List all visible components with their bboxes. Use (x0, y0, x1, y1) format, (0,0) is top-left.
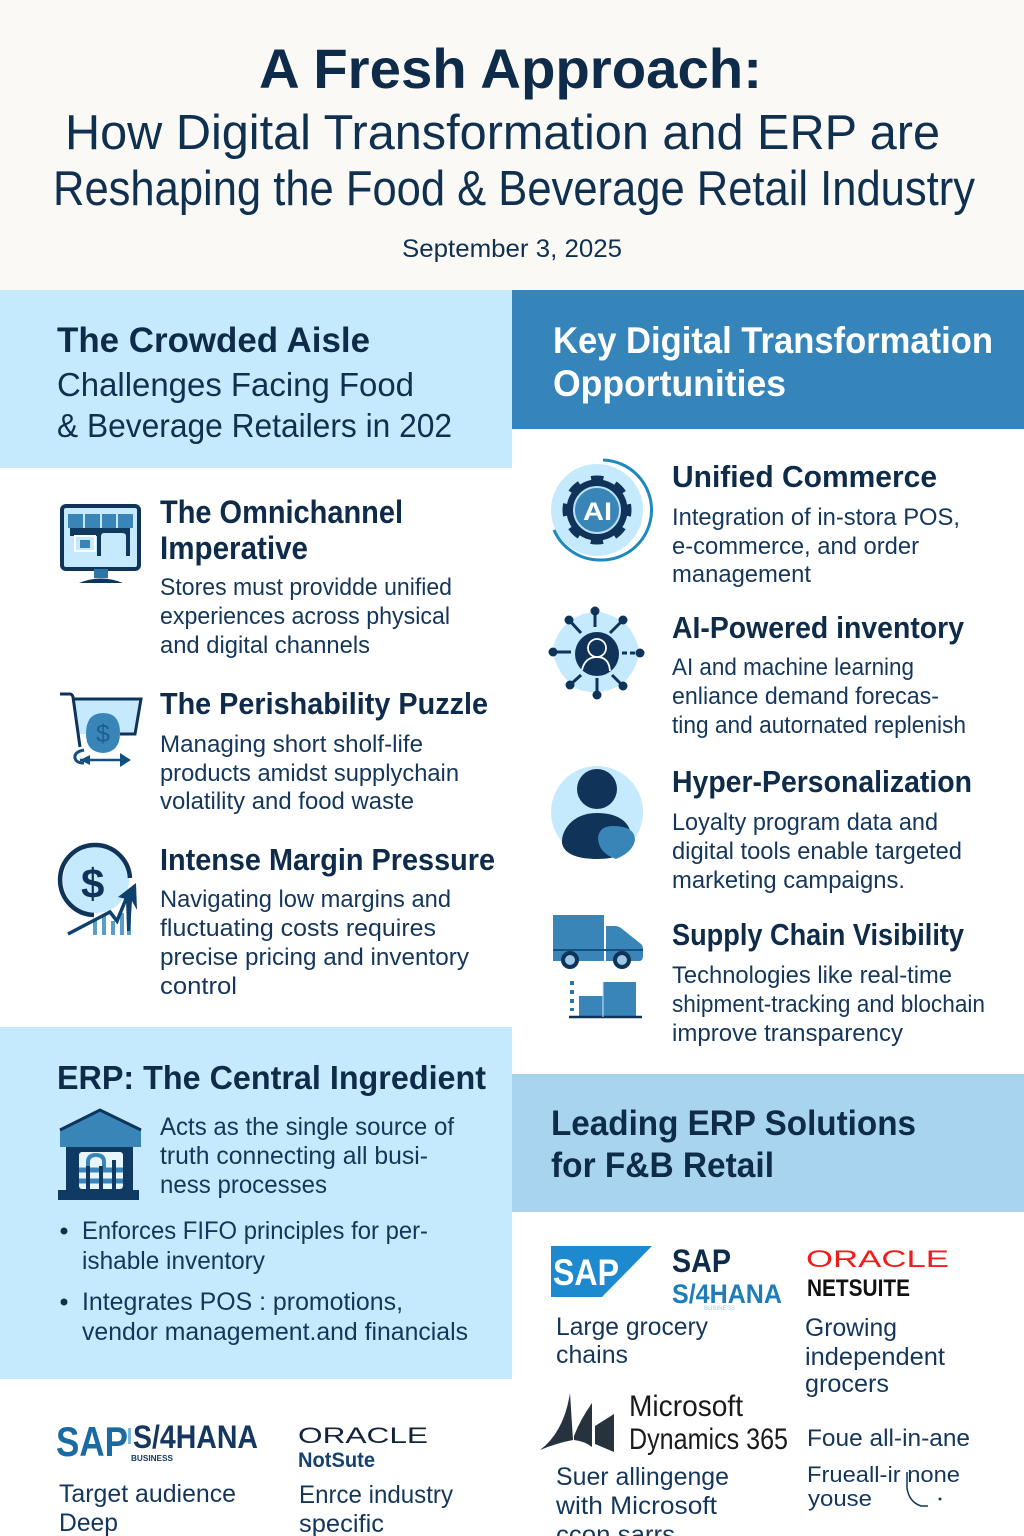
text: large grocery chains (556, 1313, 708, 1369)
logo: SAP S/4HANA small: S/4HANA (133, 1419, 258, 1455)
text: growing independent grocers: independent (805, 1343, 945, 1371)
icon: delivery truck and boxes (553, 915, 643, 1017)
text: single source of truth: ness processes (160, 1171, 327, 1199)
text: Intense Margin Pressure: precise pricing and inventory (160, 944, 469, 971)
text: single source of truth: Acts as the single source of (160, 1113, 454, 1141)
panel: ERP The Central Ingredient (0, 1027, 512, 1379)
logo: SAP S/4HANA: SAP (553, 1252, 619, 1293)
bullet: FIFO: Enforces FIFO principles for per- (82, 1217, 428, 1245)
bullet: FIFO: ishable inventory (82, 1247, 265, 1275)
logo: SAP S/4HANA (551, 1243, 782, 1312)
icon: AI network person (548, 606, 644, 700)
panel heading: The Crowded Aisle: The Crowded Aisle (57, 321, 370, 360)
text: The Omnichannel Imperative: experiences across physical (160, 603, 450, 630)
text: Unified Commerce: management (672, 561, 811, 588)
text: The Omnichannel Imperative: Stores must providde unified (160, 574, 452, 601)
text: Hyper-Personalization: Hyper-Personalization (672, 764, 972, 799)
panel heading: Leading ERP Solutions: Leading ERP Solutions (551, 1104, 916, 1143)
panel heading: The Crowded Aisle (0, 290, 512, 468)
panel heading: Key Digital Transformation Opportunities: Opportunities (553, 363, 786, 404)
bullet: POS: vendor management.and financials (82, 1318, 468, 1346)
text: The Perishability Puzzle (160, 686, 488, 815)
text: Supply Chain Visibility: Technologies like real-time (672, 962, 952, 989)
panel heading: The Crowded Aisle: Challenges Facing Food (57, 366, 414, 403)
text: single source of truth: truth connecting all busi- (160, 1142, 428, 1170)
panel heading: The Crowded Aisle: & Beverage Retailers in 202 (57, 407, 452, 444)
text: single source of truth (160, 1113, 454, 1199)
text: Hyper-Personalization: Loyalty program data and (672, 809, 938, 836)
logo: Oracle NetSuite: NETSUITE (807, 1275, 910, 1302)
text: Supply Chain Visibility: shipment-tracking and blochain (672, 991, 985, 1018)
text: Unified Commerce: Unified Commerce (672, 459, 937, 494)
text: Hyper-Personalization: digital tools enable targeted (672, 838, 962, 865)
text: The Omnichannel Imperative: The Omnichannel (160, 494, 403, 530)
logo: SAP S/4HANA: S/4HANA (672, 1279, 782, 1309)
text: all-in-one (807, 1425, 970, 1511)
text: target audience: Target audience (59, 1480, 236, 1508)
logo: Microsoft Dynamics 365: Dynamics 365 (629, 1423, 788, 1456)
text: Unified Commerce: e-commerce, and order (672, 533, 919, 560)
text: The Omnichannel Imperative: and digital channels (160, 632, 370, 659)
text: growing independent grocers: Growing (805, 1314, 897, 1342)
text: growing independent grocers (805, 1314, 945, 1398)
panel heading: Leading ERP Solutions (512, 1074, 1024, 1212)
icon: dollar coin with rising arrow (60, 845, 137, 935)
text: The Perishability Puzzle: volatility and food waste (160, 788, 414, 815)
text: AI-Powered inventory: AI and machine learning (672, 654, 914, 681)
logo: Microsoft Dynamics 365 (540, 1390, 788, 1456)
text: industry specific (299, 1481, 453, 1536)
text: The Omnichannel Imperative (160, 494, 452, 659)
text: Unified Commerce: Integration of in-stora POS, (672, 504, 960, 531)
icon: building with bag (58, 1110, 141, 1200)
panel heading: Key Digital Transformation Opportunities: Key Digital Transformation (553, 320, 993, 361)
bullet: POS (60, 1288, 468, 1346)
header: title block (0, 0, 1024, 290)
heading: ERP: The Central Ingredient (57, 1059, 486, 1096)
bullet: FIFO (60, 1217, 428, 1275)
logo: SAP S/4HANA small: BUSINESS (131, 1454, 174, 1463)
icon: dollar coin with rising arrow: $ (81, 860, 104, 907)
icon: AI gear: AI (583, 498, 612, 526)
logo: SAP S/4HANA small (56, 1418, 258, 1465)
text: AI-Powered inventory: ting and autornated replenish (672, 712, 966, 739)
text: industry specific: Enrce industry (299, 1481, 453, 1509)
text: Supply Chain Visibility (672, 917, 985, 1047)
text: target audience (59, 1480, 236, 1536)
text: Microsoft audience (555, 1463, 729, 1536)
text: all-in-one: Foue all-in-ane (807, 1425, 970, 1452)
title: A Fresh Approach: (259, 37, 762, 100)
text: Intense Margin Pressure: fluctuating costs requires (160, 915, 436, 942)
text: large grocery chains: Large grocery (556, 1313, 708, 1341)
text: Intense Margin Pressure: Navigating low margins and (160, 886, 451, 913)
text: Supply Chain Visibility: Supply Chain Visibility (672, 917, 965, 952)
text: Microsoft audience: with Microsoft (555, 1492, 717, 1520)
text: AI-Powered inventory: enliance demand forecas- (672, 683, 939, 710)
logo: Oracle NetSuite small: ORACLE (298, 1423, 428, 1448)
text: The Omnichannel Imperative: Imperative (160, 530, 308, 566)
logo: Oracle NetSuite small (298, 1423, 428, 1472)
text: Intense Margin Pressure: control (160, 973, 237, 1000)
logo: SAP S/4HANA small: SAP (56, 1418, 128, 1465)
text: The Perishability Puzzle: The Perishability Puzzle (160, 686, 488, 721)
text: Microsoft audience: Suer allingenge (556, 1463, 729, 1491)
panel heading: Key Digital Transformation Opportunities (512, 290, 1024, 429)
date: September 3, 2025 (402, 235, 622, 263)
logo: SAP S/4HANA: SAP (672, 1243, 731, 1279)
text: AI-Powered inventory: AI-Powered inventory (672, 610, 965, 645)
text: all-in-one: youse (808, 1486, 872, 1511)
logo: Microsoft Dynamics 365: Microsoft (629, 1390, 744, 1423)
icon: AI gear (551, 460, 652, 560)
text: Hyper-Personalization (672, 764, 972, 894)
logo: Oracle NetSuite small: NotSute (298, 1449, 375, 1472)
text: Hyper-Personalization: marketing campaigns. (672, 867, 905, 894)
logo: SAP S/4HANA: BUSINESS (704, 1306, 735, 1312)
text: Unified Commerce (672, 459, 960, 588)
icon: storefront monitor (62, 506, 139, 583)
text: growing independent grocers: grocers (805, 1370, 889, 1398)
icon: shopping cart (60, 694, 141, 767)
panel heading: Leading ERP Solutions: for F&B Retail (551, 1146, 774, 1185)
icon: shopping cart: $ (96, 720, 110, 748)
text: large grocery chains: chains (556, 1341, 628, 1369)
text: The Perishability Puzzle: products amidst supplychain (160, 760, 459, 787)
text: all-in-one: Frueall-ir none (807, 1462, 960, 1487)
text: AI-Powered inventory (672, 610, 966, 739)
icon: person with shield (551, 766, 643, 859)
text: Intense Margin Pressure: Intense Margin Pressure (160, 842, 495, 877)
logo: Oracle NetSuite (806, 1246, 949, 1302)
bullet: POS: Integrates POS : promotions, (82, 1288, 403, 1316)
subtitle line 1: How Digital Transformation and ERP are (65, 106, 940, 160)
logo: Oracle NetSuite: ORACLE (806, 1246, 949, 1273)
text: Intense Margin Pressure (160, 842, 495, 1000)
text: Supply Chain Visibility: improve transparency (672, 1020, 903, 1047)
text: The Perishability Puzzle: Managing short sholf-life (160, 731, 423, 758)
